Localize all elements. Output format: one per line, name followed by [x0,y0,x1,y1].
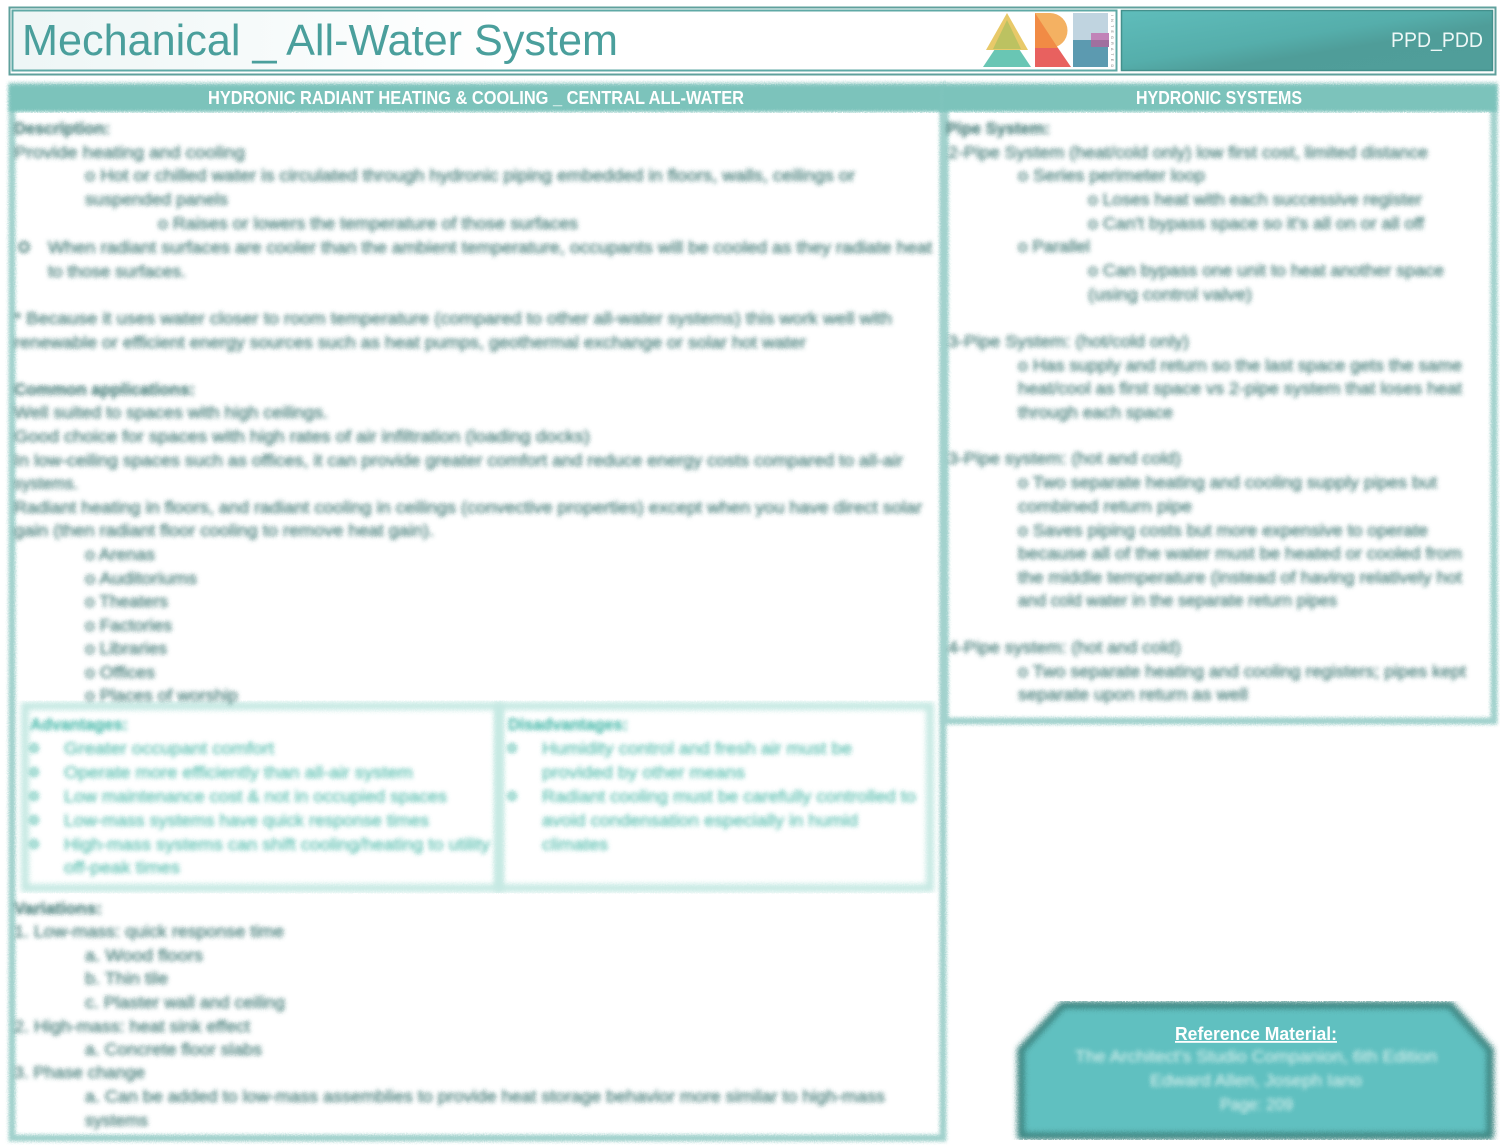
text block: pipe systems: heat/cool as first space vs 2-pipe system that loses heat [1018,379,1462,398]
text block: description: to those surfaces. [48,262,186,281]
reference citation: Edward Allen, Joseph Iano [1150,1071,1362,1090]
text block: description: suspended panels [85,190,228,209]
text block: pipe systems: through each space [1018,403,1173,422]
reference citation: The Architect's Studio Companion, 6th Edition [1075,1047,1437,1066]
text block: common applications: systems. [14,474,78,493]
text block: pipe systems: (using control valve) [1088,285,1252,304]
text block: pipe systems: o Has supply and return so the last space gets the same [1018,356,1462,375]
right heading: HYDRONIC SYSTEMS [1136,88,1302,108]
text block: description: o Hot or chilled water is circulated through hydronic piping embedded in floors, walls, ceilings or [85,166,855,185]
PPD label: PPD_PDD [1391,29,1483,52]
panel: advantages: Low-mass systems have quick response times [64,811,429,830]
text block: description: Provide heating and cooling [14,143,245,162]
panel: disadvantages: climates [542,835,608,854]
text block: pipe systems: o Can't bypass space so it's all on or all off [1088,214,1424,233]
left heading: HYDRONIC RADIANT HEATING & COOLING _ CENTRAL ALL-WATER [208,88,744,108]
text block: common applications: o Auditoriums [85,569,197,588]
panel: advantages: Advantages: [30,715,128,734]
panel: disadvantages: Radiant cooling must be carefully controlled to [542,787,916,806]
text block: common applications: o Factories [85,616,172,635]
text block: common applications: o Theaters [85,592,168,611]
logo [983,13,1114,67]
text block: common applications: Well suited to spaces with high ceilings. [14,403,328,422]
text block: pipe systems: because all of the water must be heated or cooled from [1018,544,1462,563]
panel: reference material [1021,1005,1490,1136]
title box [12,10,1116,70]
text block: variations [14,899,885,1130]
panel: advantages: High-mass systems can shift cooling/heating to utility [64,835,491,854]
reference heading: Reference Material: [1175,1024,1337,1044]
text block: pipe systems: o Loses heat with each successive register [1088,190,1422,209]
text block: pipe systems: o Series perimeter loop [1018,166,1205,185]
text block: pipe systems: o Parallel [1018,237,1090,256]
logo vertical caption: INTEGRATED [1110,15,1114,67]
left heading band [9,85,943,112]
right heading band [941,85,1497,112]
text block: variations: 2. High-mass: heat sink effect [14,1017,250,1036]
header banner [10,8,1496,74]
right panel frame [945,86,1494,721]
text block: pipe systems [946,119,1466,704]
text block: description: * Because it uses water closer to room temperature (compared to other all-water systems) this work well with [14,309,892,328]
text block: pipe systems: 3-Pipe System: (hot/cold only) [948,332,1189,351]
panel: advantages: off-peak times [64,858,180,877]
text block: common applications: In low-ceiling spaces such as offices, it can provide greater comfort and reduce energy costs compared to all-air [14,451,903,470]
panel: advantages: Low maintenance cost & not in occupied spaces [64,787,447,806]
PPD box [1122,10,1492,70]
text block: description: When radiant surfaces are cooler than the ambient temperature, occupants will be cooled as they radiate heat [48,238,932,257]
panel: advantages [30,715,491,877]
text block: common applications: Common applications: [14,380,195,399]
icon: teal trapezoid [983,49,1031,67]
text block: pipe systems: 2-Pipe System (heat/cold only) low first cost, limited distance [948,143,1428,162]
text block: variations: a. Can be added to low-mass assemblies to provide heat storage behavior more similar to high-mass [85,1087,885,1106]
text block: pipe systems: and cold water in the separate return pipes [1018,591,1337,610]
reference citation [1075,1047,1437,1114]
text block: variations: a. Concrete floor slabs [85,1040,262,1059]
icon: yellow triangle [986,13,1028,50]
icon: orange R bowl [1035,13,1068,48]
panel: advantages: Operate more efficiently than all-air system [64,763,413,782]
text block: variations: 3. Phase change [14,1063,145,1082]
panel: disadvantages: avoid condensation especially in humid [542,811,858,830]
text block: common applications: o Libraries [85,639,167,658]
text block: variations: 1. Low-mass: quick response time [14,922,284,941]
text block: variations: b. Thin tile [85,969,168,988]
title: Mechanical _ All-Water System [22,16,618,65]
text block: variations: a. Wood floors [85,946,203,965]
text block: pipe systems: o Two separate heating and cooling supply pipes but [1018,473,1437,492]
text block: variations: c. Plaster wall and ceiling [85,993,285,1012]
text block: common applications: Radiant heating in floors, and radiant cooling in ceilings (convective properties) except when you have direct solar [14,498,922,517]
icon: blue E block [1073,13,1108,40]
text block: common applications: o Places of worship [85,686,238,705]
panel: disadvantages: Disadvantages: [508,715,628,734]
advantages frames [25,706,499,888]
text block: pipe systems: o Can bypass one unit to heat another space [1088,261,1444,280]
panel: advantages: Greater occupant comfort [64,739,274,758]
text block: pipe systems: 3-Pipe system: (hot and cold) [948,449,1181,468]
reference citation: Page: 209 [1220,1095,1293,1114]
text block: description [14,119,932,352]
text block: common applications: o Offices [85,663,155,682]
reference box shape [1021,1005,1490,1136]
text block: description: Description: [14,119,110,138]
text block: pipe systems: combined return pipe [1018,497,1192,516]
text block: description: o Raises or lowers the temperature of those surfaces [158,214,578,233]
text block: description: renewable or efficient energy sources such as heat pumps, geothermal exchange or solar hot water [14,333,806,352]
text block: variations: Variations: [14,899,102,918]
panel: disadvantages: Humidity control and fresh air must be [542,739,852,758]
text block: pipe systems: separate upon return as well [1018,685,1248,704]
icon: coral R leg [1035,48,1071,67]
text block: common applications: gain (then radiant floor cooling to remove heat gain). [14,521,434,540]
left panel frame [12,86,943,1138]
text block: common applications: o Arenas [85,545,155,564]
text block: pipe systems: o Saves piping costs but more expensive to operate [1018,521,1428,540]
panel: disadvantages: provided by other means [542,763,745,782]
text block: pipe systems: Pipe System: [946,119,1050,138]
text block: pipe systems: o Two separate heating and cooling registers; pipes kept [1018,662,1466,681]
text block: variations: systems [85,1111,148,1130]
text block: pipe systems: the middle temperature (instead of having relatively hot [1018,568,1462,587]
text block: common applications [14,380,922,705]
text block: pipe systems: 4-Pipe system: (hot and cold) [948,638,1181,657]
panel: disadvantages [508,715,916,854]
text block: common applications: Good choice for spaces with high rates of air infiltration (loading docks) [14,427,590,446]
